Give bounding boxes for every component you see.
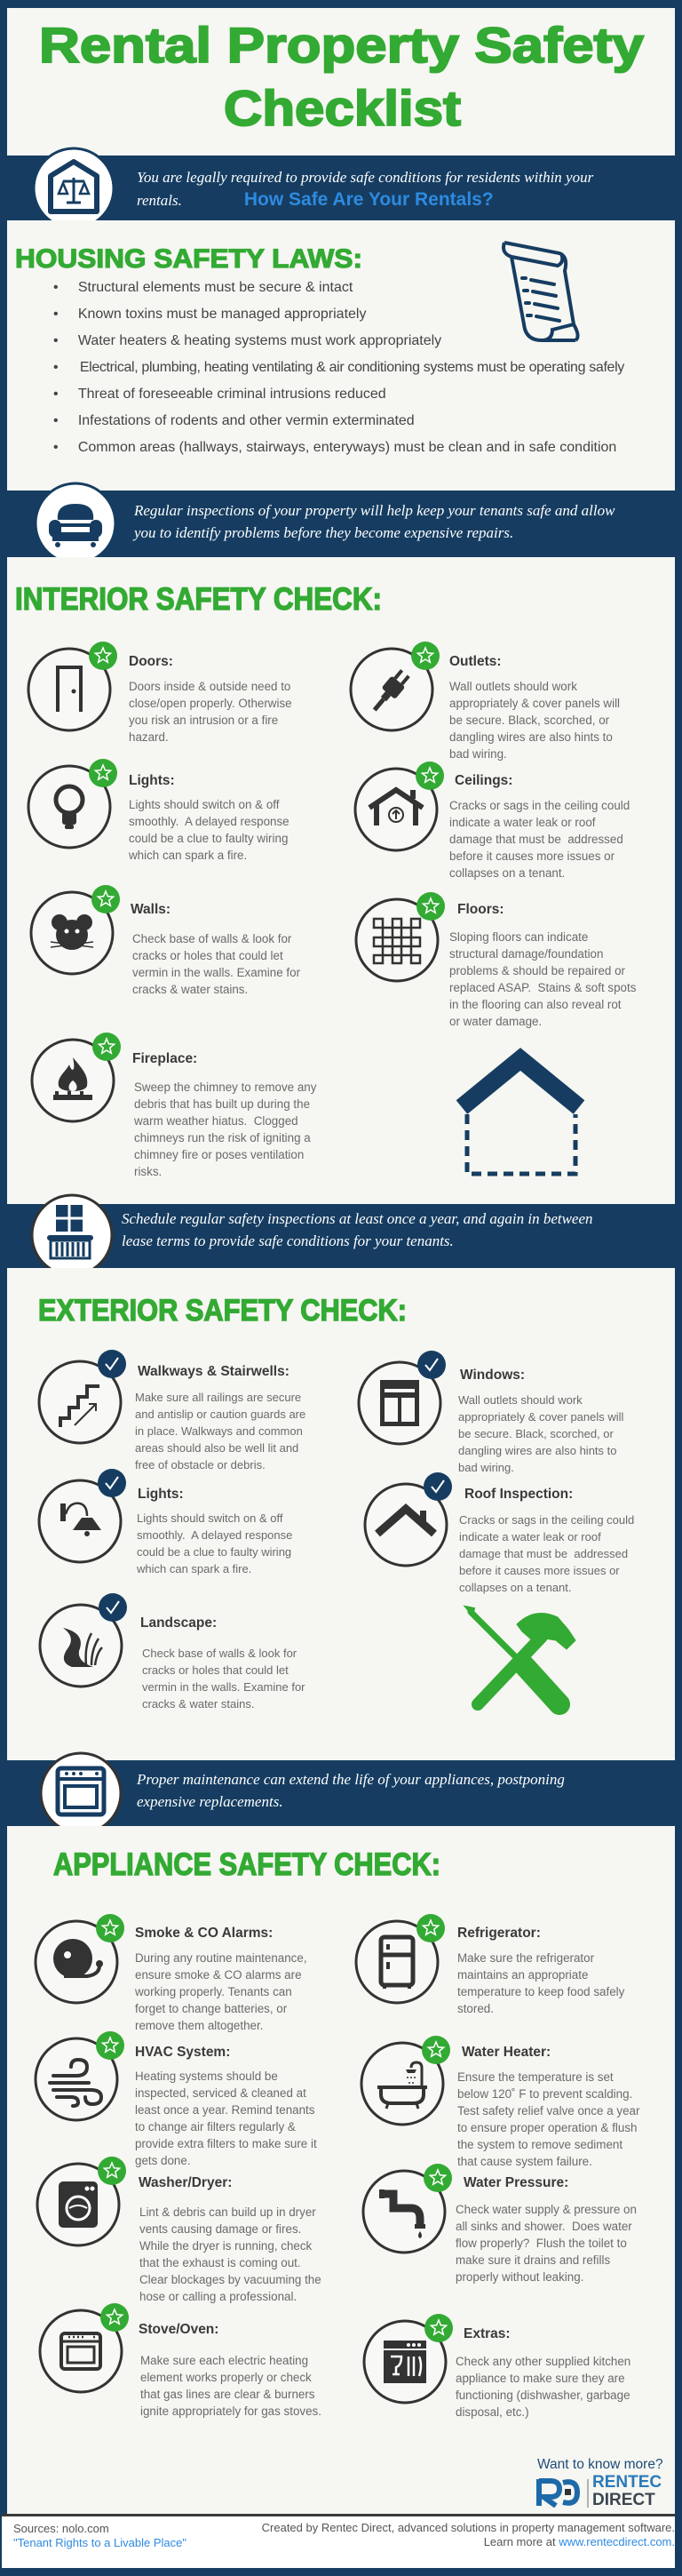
item: water pressure: Water Pressure: — [464, 2175, 568, 2190]
item: refrigerator: temperature to keep food safely — [457, 1985, 624, 1998]
item: washer/dryer: Washer/Dryer: — [139, 2175, 232, 2190]
item: washer/dryer: that the exhaust is coming out. — [139, 2256, 301, 2269]
item: water pressure: all sinks and shower. Does water — [456, 2220, 632, 2233]
item: ceilings: Ceilings: — [455, 773, 512, 788]
item: walkways & stairwells: Walkways & Stairwells: — [138, 1364, 289, 1379]
item: roof inspection: collapses on a tenant. — [459, 1581, 571, 1594]
item: extras — [362, 2314, 630, 2419]
item: doors: hazard. — [129, 730, 169, 744]
item: water heater: Test safety relief valve once a year — [457, 2104, 639, 2117]
item: stove/oven: ignite appropriately for gas stoves. — [140, 2405, 321, 2418]
item: exterior lights: smoothly. A delayed response — [137, 1528, 292, 1542]
item: water pressure: properly without leaking. — [456, 2270, 583, 2284]
item: ceilings: collapses on a tenant. — [449, 866, 565, 880]
item: landscape — [39, 1593, 305, 1711]
item: hvac system: Heating systems should be — [135, 2070, 278, 2083]
item: washer/dryer: While the dryer is running, check — [139, 2239, 312, 2253]
item: windows: bad wiring. — [458, 1461, 514, 1474]
credits text — [262, 2521, 675, 2548]
item: stove/oven: Make sure each electric heating — [140, 2354, 308, 2367]
item: hvac system: least once a year. Remind tenants — [135, 2103, 314, 2117]
item: walkways & stairwells: in place. Walkways and common — [135, 1424, 303, 1438]
item: exterior lights: Lights: — [138, 1487, 184, 1502]
item: stove/oven: element works properly or check — [140, 2371, 312, 2384]
item: washer/dryer: hose or calling a professional. — [139, 2290, 297, 2303]
banner 4 text: expensive replacements. — [137, 1793, 283, 1810]
item: landscape: Landscape: — [140, 1615, 217, 1631]
item: stove/oven: Stove/Oven: — [139, 2322, 218, 2337]
item: roof inspection: indicate a water leak or roof — [459, 1530, 601, 1543]
banner 3 text — [122, 1210, 593, 1249]
banner 4 text — [137, 1771, 565, 1810]
icon: stove — [39, 1752, 123, 1826]
sources text — [13, 2522, 186, 2549]
item: doors: Doors inside & outside need to — [129, 680, 290, 693]
icon: tools (screwdriver and hammer) — [464, 1605, 576, 1715]
item: water heater: Water Heater: — [462, 2045, 551, 2060]
icon: scroll — [502, 241, 580, 342]
item: refrigerator: stored. — [457, 2002, 494, 2015]
item: hvac system: gets done. — [135, 2154, 191, 2167]
item: fireplace: chimneys run the risk of igniting a — [134, 1131, 311, 1144]
item: roof inspection — [364, 1472, 634, 1594]
item: walls: cracks & water stains. — [132, 983, 248, 996]
item: water pressure: Check water supply & pressure on — [456, 2203, 637, 2216]
bullet list: laws: • Structural elements must be secure & intact — [53, 280, 353, 295]
item: floors: structural damage/foundation — [449, 947, 603, 961]
item: exterior lights: Lights should switch on & off — [137, 1511, 283, 1525]
item: doors: you risk an intrusion or a fire — [129, 714, 278, 727]
item: ceilings: before it causes more issues or — [449, 849, 615, 863]
item: smoke & co alarms: working properly. Tenants can — [135, 1985, 292, 1998]
item: outlets: dangling wires are also hints to — [449, 730, 613, 744]
item: water heater: that cause system failure. — [457, 2155, 592, 2168]
icon: armchair — [37, 482, 114, 557]
item: doors: Doors: — [129, 654, 173, 669]
item: walls: vermin in the walls. Examine for — [132, 966, 300, 979]
item: extras: appliance to make sure they are — [456, 2372, 625, 2385]
title: Checklist — [224, 80, 461, 136]
item: fireplace: chimney fire or poses ventilation — [134, 1148, 304, 1161]
item: windows — [357, 1351, 623, 1474]
item: hvac system: to change air filters regularly & — [135, 2120, 296, 2133]
panel: title area — [7, 8, 675, 156]
item: outlets: bad wiring. — [449, 747, 507, 761]
item: water pressure: make sure it drains and refills — [456, 2253, 610, 2267]
item: smoke & co alarms — [34, 1914, 307, 2032]
banner 2 text: you to identify problems before they become expensive repairs. — [134, 524, 513, 541]
banner 1 text — [137, 169, 593, 210]
item: smoke & co alarms: remove them altogether. — [135, 2019, 263, 2032]
item: extras: disposal, etc.) — [456, 2405, 529, 2419]
item: extras: Check any other supplied kitchen — [456, 2355, 630, 2368]
item: water heater: Ensure the temperature is set — [457, 2070, 614, 2084]
item: walls — [30, 885, 300, 996]
item: outlets — [350, 642, 620, 761]
item: roof inspection: before it causes more issues or — [459, 1564, 620, 1577]
item: floors: replaced ASAP. Stains & soft spots — [449, 981, 636, 994]
item: washer/dryer: Clear blockages by vacuuming the — [139, 2273, 321, 2286]
sources text: "Tenant Rights to a Livable Place" — [13, 2536, 186, 2549]
item: smoke & co alarms: During any routine maintenance, — [135, 1951, 307, 1965]
icon: legal house with scales — [36, 148, 112, 220]
item: exterior lights — [37, 1469, 292, 1575]
item: windows: Wall outlets should work — [458, 1393, 583, 1407]
banner 2 text: Regular inspections of your property will help keep your tenants safe and allow — [134, 502, 615, 519]
item: floors: Sloping floors can indicate — [449, 930, 588, 944]
item: smoke & co alarms: Smoke & CO Alarms: — [135, 1926, 273, 1941]
panel: interior safety check — [7, 557, 675, 1204]
item: walkways & stairwells — [37, 1350, 305, 1471]
item: walkways & stairwells: free of obstacle or debris. — [135, 1458, 266, 1471]
item: water pressure — [362, 2164, 637, 2284]
item: doors — [27, 642, 292, 744]
item: walkways & stairwells: areas should also be well lit and — [135, 1441, 298, 1455]
item: windows: Windows: — [460, 1368, 525, 1383]
item: fireplace: debris that has built up during the — [134, 1097, 310, 1111]
item: hvac system: inspected, serviced & cleaned at — [135, 2086, 306, 2100]
item: fireplace: Fireplace: — [132, 1051, 197, 1066]
item: lights: Lights should switch on & off — [129, 798, 279, 811]
item: ceilings — [353, 762, 630, 880]
bullet list: laws: • Known toxins must be managed appropriately — [53, 307, 366, 322]
item: floors: Floors: — [457, 902, 504, 917]
item: outlets: Wall outlets should work — [449, 680, 577, 693]
sources text: Sources: nolo.com — [13, 2522, 109, 2535]
item: landscape: cracks or holes that could let — [142, 1663, 289, 1677]
bullet list: laws: • Common areas (hallways, stairways, enteryways) must be clean and in safe condition — [53, 440, 616, 455]
item: windows: dangling wires are also hints to — [458, 1444, 616, 1457]
item: doors: close/open properly. Otherwise — [129, 697, 292, 710]
item: refrigerator: Refrigerator: — [457, 1926, 541, 1941]
item: lights: smoothly. A delayed response — [129, 815, 289, 828]
item: refrigerator: maintains an appropriate — [457, 1968, 588, 1982]
item: hvac system: HVAC System: — [135, 2045, 230, 2060]
item: refrigerator — [355, 1914, 625, 2015]
item: fireplace: risks. — [134, 1165, 162, 1178]
item: roof inspection: damage that must be addressed — [459, 1547, 628, 1560]
item: lights: which can spark a fire. — [129, 849, 247, 862]
bullet list: laws: • Infestations of rodents and other vermin exterminated — [53, 413, 415, 428]
item: landscape: Check base of walls & look for — [142, 1647, 297, 1660]
item: fireplace: warm weather hiatus. Clogged — [134, 1114, 298, 1128]
item: lights — [27, 759, 289, 862]
heading: housing safety laws: HOUSING SAFETY LAWS: — [15, 244, 362, 274]
logo: rentec direct — [536, 2457, 663, 2509]
item: outlets: be secure. Black, scorched, or — [449, 714, 609, 727]
item: landscape: cracks & water stains. — [142, 1697, 254, 1711]
title — [39, 17, 645, 136]
panel: exterior safety check — [7, 1268, 675, 1760]
bullet list: laws: • Water heaters & heating systems must work appropriately — [53, 333, 441, 348]
panel: appliance safety check — [7, 1826, 675, 2514]
item: floors: problems & should be repaired or — [449, 964, 625, 977]
item: roof inspection: Cracks or sags in the ceiling could — [459, 1513, 634, 1527]
logo: rentec direct: DIRECT — [592, 2491, 655, 2509]
logo: rentec direct: RENTEC — [592, 2473, 662, 2492]
item: windows: appropriately & cover panels will — [458, 1410, 623, 1424]
item: floors: or water damage. — [449, 1015, 542, 1028]
item: walkways & stairwells: and antislip or caution guards are — [135, 1408, 305, 1421]
banner 1 text: You are legally required to provide safe conditions for residents within your — [137, 169, 593, 186]
item: stove/oven: that gas lines are clear & burners — [140, 2388, 314, 2401]
item: smoke & co alarms: ensure smoke & CO alarms are — [135, 1968, 302, 1982]
item: ceilings: Cracks or sags in the ceiling could — [449, 799, 630, 812]
item: walls: Check base of walls & look for — [132, 932, 291, 945]
item: fireplace: Sweep the chimney to remove any — [134, 1081, 316, 1094]
item: washer/dryer — [36, 2157, 321, 2303]
item: exterior lights: could be a clue to faulty wiring — [137, 1545, 291, 1559]
title: Rental Property Safety — [39, 17, 644, 73]
icon: window with balcony — [30, 1194, 114, 1268]
item: washer/dryer: Lint & debris can build up in dryer — [139, 2205, 316, 2219]
item: water heater: to ensure proper operation & flush — [457, 2121, 637, 2134]
item: hvac system — [34, 2031, 317, 2167]
item: walkways & stairwells: Make sure all railings are secure — [135, 1391, 301, 1404]
item: floors — [355, 892, 636, 1028]
item: extras: Extras: — [464, 2326, 511, 2341]
item: walls: cracks or holes that could let — [132, 949, 283, 962]
item: refrigerator: Make sure the refrigerator — [457, 1951, 594, 1965]
item: water pressure: flow properly? Flush the toilet to — [456, 2237, 627, 2250]
item: lights: could be a clue to faulty wiring — [129, 832, 288, 845]
icon: dashed house — [456, 1048, 584, 1176]
item: stove/oven — [39, 2303, 321, 2418]
footer — [2, 2514, 675, 2568]
item: water heater: below 120˚ F to prevent scalding. — [457, 2087, 632, 2101]
item: outlets: Outlets: — [449, 654, 502, 669]
logo: rentec direct: Want to know more? — [537, 2457, 663, 2472]
item: hvac system: provide extra filters to make sure it — [135, 2137, 317, 2150]
banner 3 text: Schedule regular safety inspections at least once a year, and again in between — [122, 1210, 593, 1227]
item: water heater — [361, 2036, 639, 2168]
item: lights: Lights: — [129, 773, 175, 788]
item: ceilings: damage that must be addressed — [449, 833, 623, 846]
banner 3 text: lease terms to provide safe conditions for your tenants. — [122, 1232, 454, 1249]
banner 4 text: Proper maintenance can extend the life of your appliances, postponing — [137, 1771, 565, 1788]
item: outlets: appropriately & cover panels will — [449, 697, 620, 710]
banner 2 text — [133, 502, 615, 541]
item: washer/dryer: vents causing damage or fires. — [139, 2222, 301, 2236]
item: floors: in the flooring can also reveal rot — [449, 998, 622, 1011]
item: smoke & co alarms: forget to change batteries, or — [135, 2002, 287, 2015]
bullet list: laws: • Threat of foreseeable criminal intrusions reduced — [53, 387, 386, 402]
bullet list: laws — [53, 280, 625, 455]
item: roof inspection: Roof Inspection: — [464, 1487, 573, 1502]
panel: housing safety laws — [7, 220, 675, 490]
credits text: Created by Rentec Direct, advanced solutions in property management software. — [262, 2521, 675, 2534]
item: ceilings: indicate a water leak or roof — [449, 816, 595, 829]
item: windows: be secure. Black, scorched, or — [458, 1427, 614, 1440]
bullet list: laws: • Electrical, plumbing, heating ventilating & air conditioning systems must be operating safely — [53, 360, 624, 375]
banner 1 text: rentals. How Safe Are Your Rentals? — [137, 189, 494, 210]
item: water heater: the system to remove sediment — [457, 2138, 623, 2151]
item: landscape: vermin in the walls. Examine for — [142, 1680, 305, 1694]
item: extras: functioning (dishwasher, garbage — [456, 2389, 630, 2402]
credits text: Learn more at www.rentecdirect.com. — [484, 2535, 675, 2548]
item: exterior lights: which can spark a fire. — [137, 1562, 251, 1575]
item: fireplace — [30, 1033, 316, 1178]
item: walls: Walls: — [131, 902, 170, 917]
